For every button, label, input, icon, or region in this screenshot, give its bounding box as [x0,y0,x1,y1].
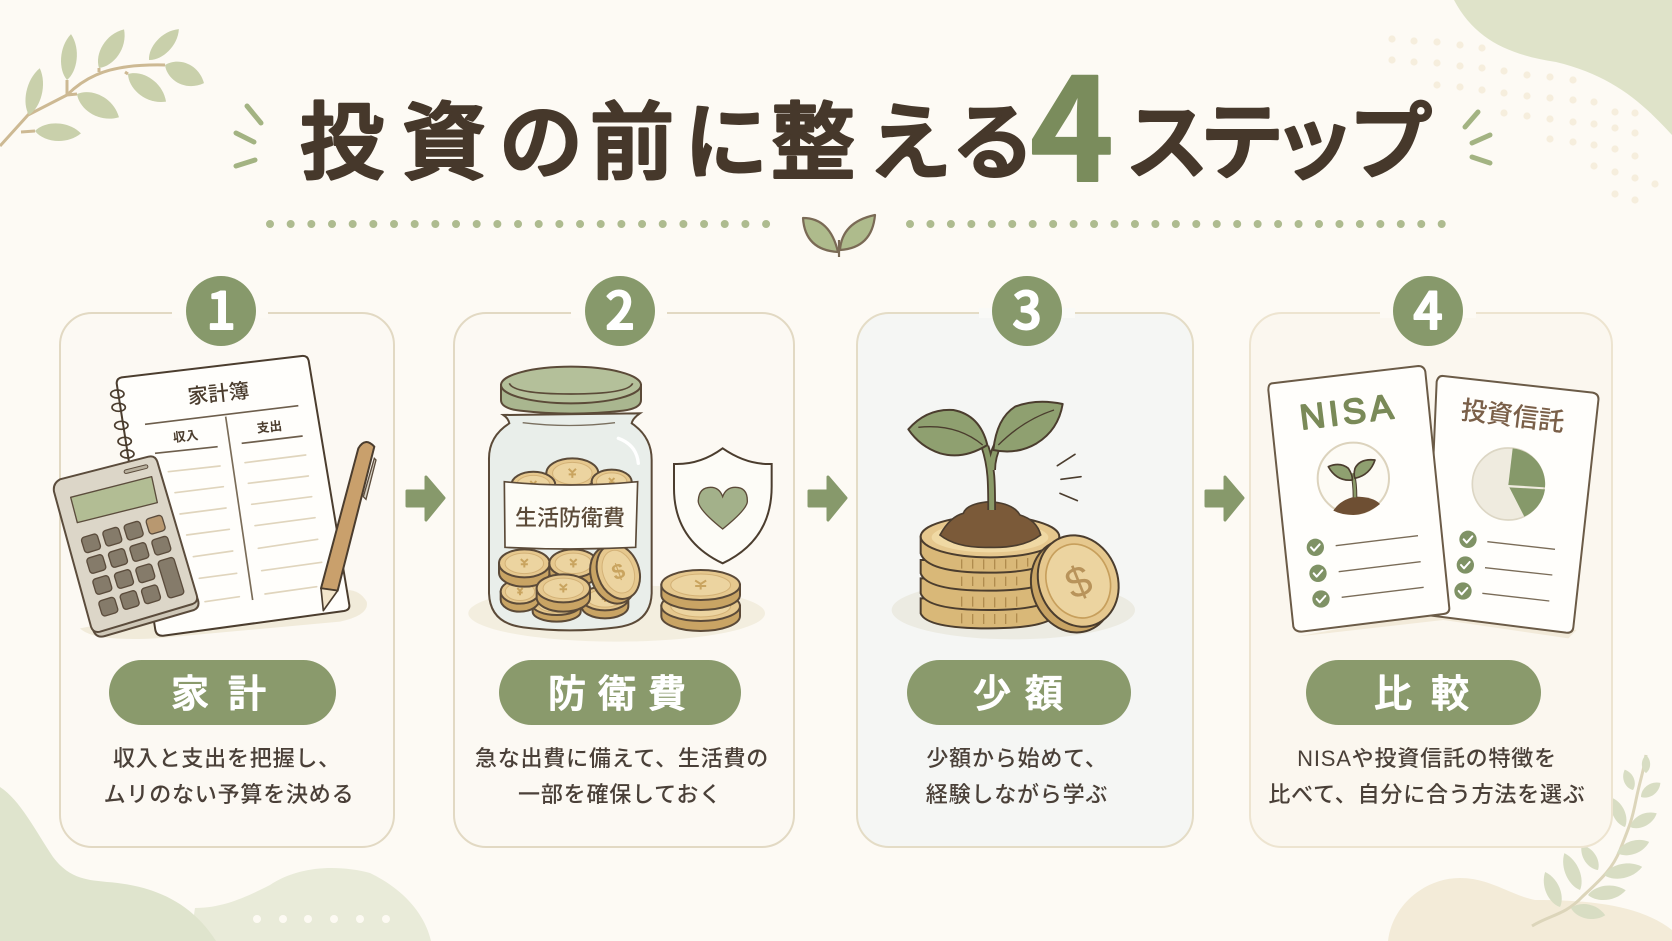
divider: dotted line right [910,220,1442,228]
description 1 [104,746,354,807]
description 4 [1268,746,1586,807]
label pill 少額 [907,660,1131,725]
illustration: notebook, calculator, pen [54,356,376,639]
illustration: sprout on coin stack: $ [1059,556,1099,609]
label pill 家計: 家計 [171,674,266,716]
description 2 [475,746,769,807]
description 2: 一部を確保しておく [518,782,722,807]
illustration: coin jar, shield, coins [468,367,772,642]
label pill 防衛費 [499,660,741,725]
illustration: coin jar, shield, coins: 生活防衛費 [515,506,625,531]
panel: step 3 少額 [857,270,1193,847]
blob: top right [1454,0,1672,135]
sparks: title right [1465,112,1490,163]
illustration: NISA and 投資信託 cards: NISA [1298,387,1399,438]
badge 1 [186,270,256,346]
description 2: 急な出費に備えて、生活費の [475,746,769,771]
label pill 比較 [1306,660,1541,725]
arrow 1 [407,477,444,520]
title [300,16,1432,222]
blob: bottom left [0,787,216,941]
title: 投資の前に整える [300,96,1035,190]
badge 4 [1393,270,1463,346]
title: 4 [1030,16,1114,222]
description 4: 比べて、自分に合う方法を選ぶ [1268,782,1586,807]
panel: step 2 防衛費 [454,270,794,847]
panel: step 4 比較 [1250,270,1612,847]
badge 4: 4 [1413,270,1443,344]
description 3: 少額から始めて、 [926,746,1108,771]
label pill 比較: 比較 [1374,674,1469,716]
sparks: title left [236,106,261,166]
description 3 [926,746,1108,807]
arrow 2 [809,477,846,520]
branch: top left [0,24,209,146]
description 1: ムリのない予算を決める [104,782,354,807]
label pill 家計 [109,660,336,725]
blob: bottom right [1388,878,1672,941]
label pill 防衛費: 防衛費 [548,674,686,716]
blob: bottom left light [190,868,431,941]
dots: bottom left [253,915,390,923]
illustration: NISA and 投資信託 cards: 投資信託 [1459,395,1566,437]
title: ステップ [1125,96,1432,190]
description 4: NISAや投資信託の特徴を [1297,746,1557,771]
illustration: notebook, calculator, pen: 家計簿 [186,379,251,409]
dots: top right [1388,35,1659,204]
illustration: sprout on coin stack [892,402,1135,645]
icon: divider sprout [803,215,875,257]
illustration: notebook, calculator, pen: 収入 [172,428,199,445]
badge 3 [992,270,1062,346]
illustration: NISA and 投資信託 cards [1268,366,1598,638]
illustration: coin jar, shield, coins: $ [608,558,628,585]
description 1: 収入と支出を把握し、 [113,746,341,771]
branch: bottom right [1532,755,1664,926]
divider: dotted line left [270,220,770,228]
badge 1: 1 [206,270,236,344]
description 3: 経験しながら学ぶ [926,782,1108,807]
badge 2: 2 [605,270,635,344]
badge 2 [585,270,655,346]
illustration: notebook, calculator, pen: 支出 [256,418,283,436]
arrow 3 [1206,477,1243,520]
badge 3: 3 [1012,270,1042,344]
panel: step 1 家計 [54,270,394,847]
label pill 少額: 少額 [973,674,1063,716]
